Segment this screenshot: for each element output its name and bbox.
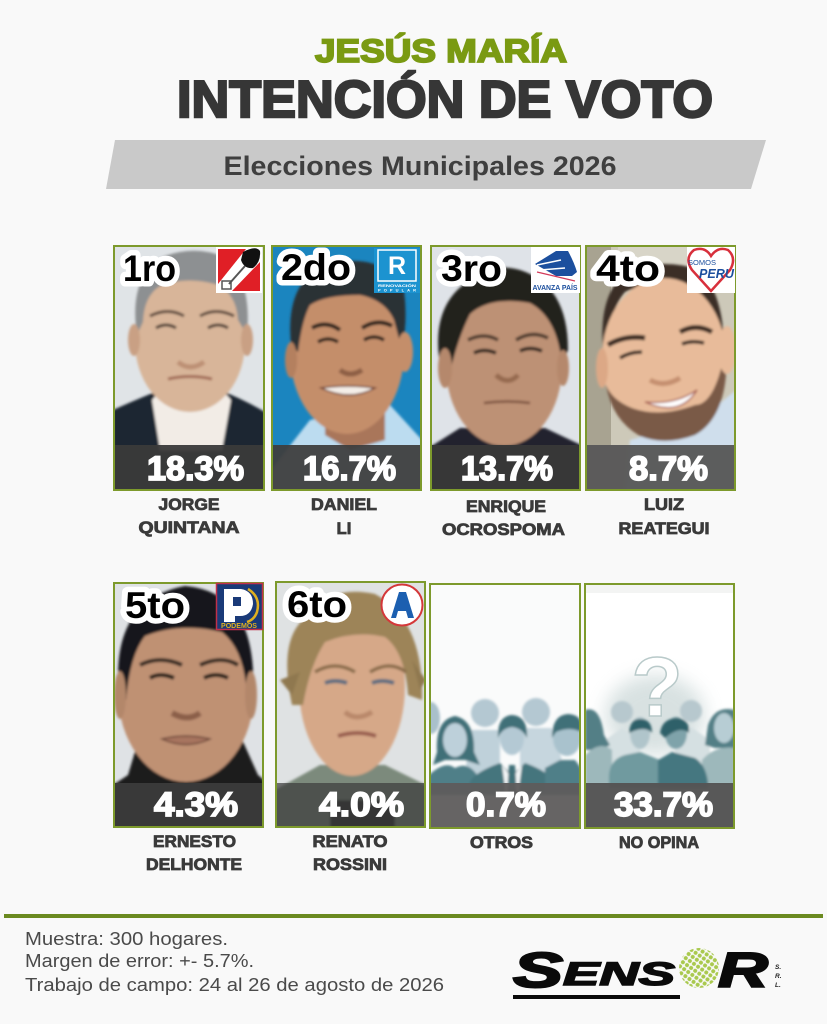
candidate name: LI: [337, 520, 351, 538]
logo: Sensor S.R.L.: ENS: [563, 956, 676, 992]
party logo: Podemos: [216, 584, 262, 630]
percentage bar: [584, 783, 735, 829]
percentage bar: [113, 783, 264, 828]
methodology note: [25, 929, 444, 995]
party logo: Renovación Popular: POPULAR: [378, 288, 416, 292]
panel: No opina: [584, 583, 735, 852]
logo: Sensor S.R.L.: S.: [775, 964, 781, 971]
candidate name: JORGE: [158, 496, 220, 514]
candidate name: LUIZ: [644, 496, 684, 514]
candidate name: RENATO: [312, 833, 388, 851]
logo: Sensor S.R.L.: L.: [775, 982, 781, 989]
candidate name: [138, 496, 240, 537]
card border: [586, 246, 735, 490]
logo: Sensor S.R.L.: S: [513, 944, 563, 998]
percentage bar: [113, 445, 265, 491]
party logo: Avanza País: [531, 247, 580, 293]
rank label: 3ro: [441, 248, 502, 289]
logo: Sensor S.R.L.: R: [718, 944, 769, 998]
card border: [430, 584, 580, 828]
subtitle banner: [106, 140, 766, 189]
candidate name: OCROSPOMA: [442, 521, 565, 539]
candidate name: ROSSINI: [313, 856, 387, 874]
rank label: 6to: [287, 584, 347, 625]
card border: [114, 583, 263, 827]
card border: [585, 584, 734, 828]
card border: [114, 246, 264, 490]
subtitle banner: Elecciones Municipales 2026: [224, 151, 616, 181]
rank label: 1ro: [123, 248, 176, 289]
percentage bar: [430, 445, 581, 491]
title: main heading: INTENCIÓN DE VOTO: [177, 71, 713, 129]
label: NO OPINA: [619, 834, 699, 852]
panel: candidate 4 Luiz Reategui: [585, 245, 736, 538]
footer divider: [4, 914, 823, 918]
panel: candidate 6 Renato Rossini: [275, 581, 426, 874]
rank label: 4to: [596, 248, 660, 289]
party logo: A circle: [382, 584, 422, 626]
label: OTROS: [470, 834, 533, 852]
panel: candidate 2 Daniel Li: [271, 245, 422, 538]
question mark: ?: [631, 640, 683, 734]
candidate name: ENRIQUE: [466, 498, 546, 516]
candidate name: REATEGUI: [618, 520, 710, 538]
candidate name: DELHONTE: [146, 856, 242, 874]
title: location: JESÚS MARÍA: [315, 33, 567, 69]
candidate name: QUINTANA: [138, 519, 240, 537]
party logo: Somos Perú: [687, 247, 735, 293]
candidate name: [146, 833, 242, 874]
card border: [276, 582, 425, 827]
percentage bar: 33.7%: [614, 786, 713, 824]
methodology note: Trabajo de campo: 24 al 26 de agosto de 2026: [25, 975, 444, 995]
party logo: Renovación Popular: R: [388, 252, 406, 280]
methodology note: Margen de error: +- 5.7%.: [25, 951, 254, 971]
party logo: Podemos: PODEMOS: [221, 623, 257, 630]
card border: [272, 246, 421, 490]
portrait: Jorge Quintana: [113, 245, 265, 491]
portrait: Ernesto Delhonte: [113, 582, 264, 828]
portrait: Renato Rossini: [275, 581, 426, 828]
percentage bar: 16.7%: [303, 450, 396, 488]
panel: candidate 3 Enrique Ocrospoma: [430, 245, 581, 539]
illustration: crowd with question mark: [586, 656, 733, 783]
party logo: Somos Perú: PERU: [699, 266, 735, 281]
logo dot sphere: [678, 947, 720, 989]
portrait: Enrique Ocrospoma: [432, 247, 579, 445]
panel: candidate 5 Ernesto Delhonte: [113, 582, 264, 874]
percentage bar: [429, 783, 581, 829]
party logo: Somos Perú: SOMOS: [688, 260, 716, 267]
percentage bar: [271, 445, 422, 491]
percentage bar: [275, 783, 426, 828]
percentage bar: [585, 445, 736, 491]
percentage bar: 18.3%: [147, 450, 244, 488]
party logo: shovel: [216, 247, 262, 293]
illustration: crowd silhouettes: [431, 696, 579, 794]
percentage bar: 0.7%: [466, 786, 546, 824]
logo: Sensor S.R.L.: R.: [775, 973, 782, 980]
candidate name: [442, 498, 565, 539]
percentage bar: 4.3%: [154, 786, 238, 824]
portrait: Daniel Li: [273, 247, 420, 466]
panel: candidate 1 Jorge Quintana: [113, 245, 265, 537]
party logo: Renovación Popular: RENOVACIÓN: [378, 283, 416, 288]
percentage bar: 13.7%: [461, 450, 553, 488]
methodology note: Muestra: 300 hogares.: [25, 929, 228, 949]
percentage bar: 8.7%: [629, 450, 708, 488]
card border: [431, 246, 580, 490]
candidate name: DANIEL: [311, 496, 377, 514]
party logo: Avanza País: AVANZA PAÍS: [532, 283, 578, 292]
candidate name: [311, 496, 377, 538]
candidate name: [312, 833, 388, 874]
candidate name: [618, 496, 710, 538]
rank label: 5to: [125, 585, 185, 626]
candidate name: ERNESTO: [153, 833, 236, 851]
party logo: Renovación Popular: [374, 248, 420, 293]
panel: Otros: [422, 583, 581, 852]
portrait: Luiz Reategui: [587, 247, 734, 445]
logo: Sensor S.R.L.: [513, 944, 782, 999]
percentage bar: 4.0%: [319, 786, 404, 824]
rank label: 2do: [281, 247, 351, 288]
